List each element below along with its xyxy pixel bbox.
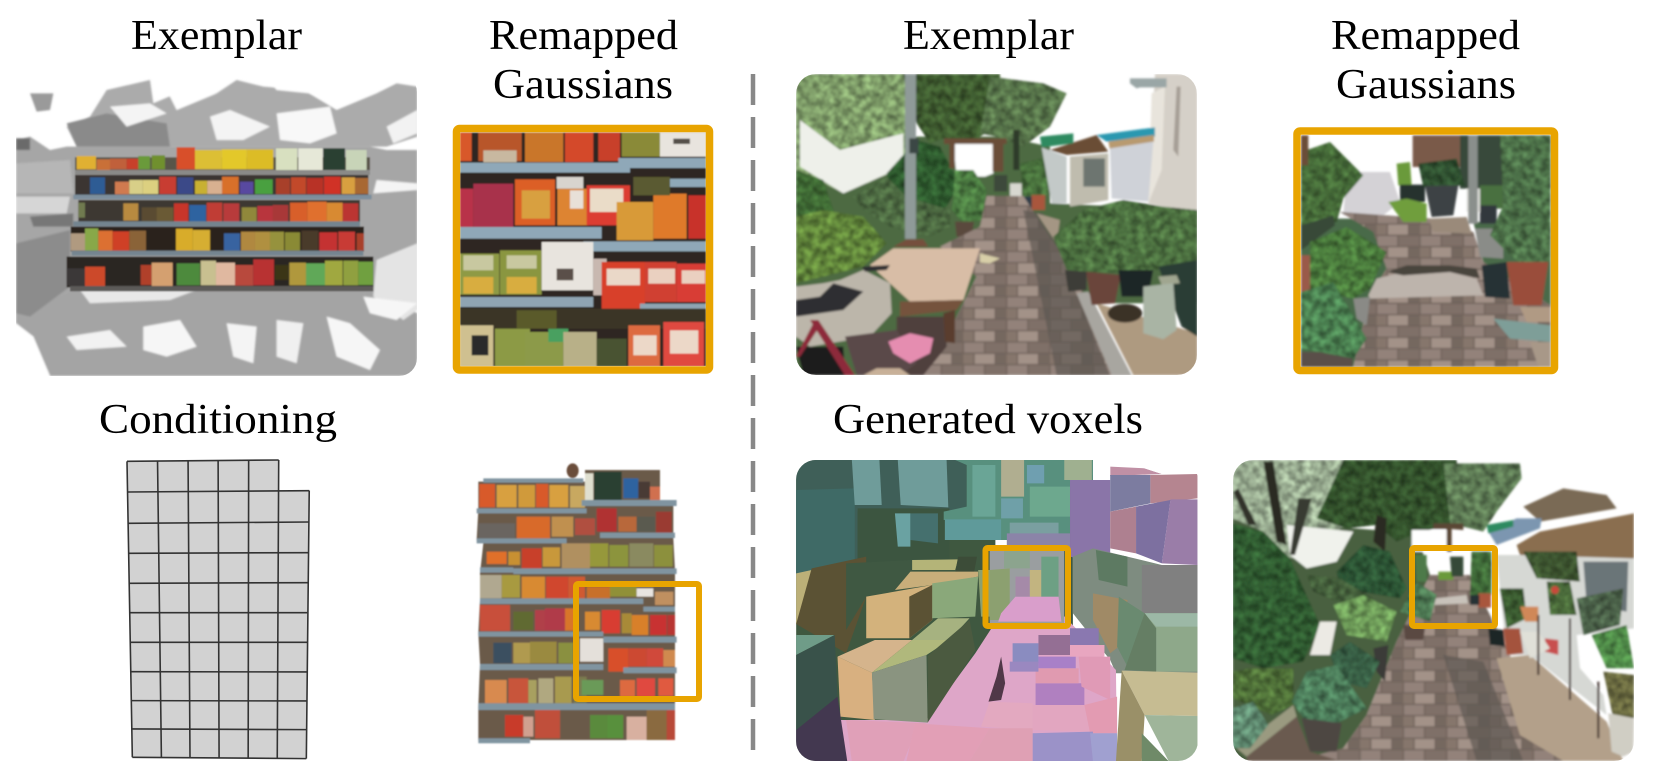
row 7 bags: [485, 677, 673, 703]
mid foliage: [853, 177, 950, 237]
foliage under-layer filling gaps: [1233, 518, 1430, 761]
row 1 bags: [479, 472, 660, 508]
shelf row 4 products: [71, 227, 364, 256]
panel: generated voxels render: [796, 460, 1198, 761]
shelf strip 2: [460, 227, 706, 251]
plants behind pavement: [952, 170, 987, 223]
upper-centre teal voxels: [944, 460, 1093, 550]
foliage under-layer filling gaps: [796, 137, 1197, 375]
title: Conditioning: Conditioning: [99, 397, 337, 443]
shelf row 3 products: [73, 200, 360, 226]
panel: reconstructed snack shelf: [477, 463, 699, 743]
grey foliage surroundings: [16, 74, 417, 376]
pavement: [1293, 575, 1563, 761]
row 5 bags: [480, 605, 675, 635]
pink floor: [840, 613, 1117, 761]
right large plant: [1475, 135, 1551, 305]
shelf row 1 products: [75, 147, 370, 175]
row 8 bags: [505, 708, 675, 740]
panel: alley exemplar photo: [796, 74, 1197, 375]
backing rows: [477, 470, 675, 740]
second row of bags: [460, 177, 706, 240]
right lower blocks: [1116, 613, 1197, 761]
title: Exemplar (left): Exemplar: [131, 13, 302, 59]
building wall: [1040, 74, 1197, 213]
tan bowl: [863, 368, 910, 375]
potted plants on right: [1053, 200, 1197, 273]
bottom row of bags: [460, 309, 706, 366]
title: Remapped Gaussians (left): Remapped: [489, 13, 678, 59]
pavement: [918, 196, 1132, 375]
puddle: [1368, 269, 1483, 299]
title: Exemplar (right): Exemplar: [903, 13, 1074, 59]
left potted plants: [1233, 582, 1437, 761]
bicycle and cloth: [796, 270, 892, 347]
pergola: [944, 138, 1007, 172]
pavement: [1340, 212, 1551, 367]
panel: conditioning grid: [127, 460, 309, 759]
divider: dashed vertical line: [751, 74, 755, 750]
right sandy verge: [1497, 655, 1623, 761]
left tree: [1301, 142, 1363, 225]
grid lines: [127, 460, 309, 759]
bottom-left dark block: [796, 635, 847, 761]
shelf row 5 products: [67, 257, 373, 291]
shelf strips: [477, 478, 677, 743]
tree canopy: [1233, 460, 1522, 568]
pot at base of pole: [893, 239, 928, 247]
shelf strip 1: [460, 158, 706, 173]
title: Remapped Gaussians (right): [1331, 13, 1520, 108]
orange highlight box: [576, 584, 699, 699]
far plants in crop: [1415, 552, 1492, 608]
title: Remapped Gaussians (left): Gaussians: [493, 62, 673, 108]
pink bucket: [888, 333, 933, 363]
kerb strip: [1077, 292, 1132, 375]
title: Generated voxels: Generated voxels: [833, 397, 1143, 443]
left stepped blocks: [838, 570, 1010, 723]
lattice: [1413, 135, 1460, 167]
upper-left dark teal voxels: [796, 460, 967, 603]
third row of bags: [460, 242, 706, 312]
left olive wall: [796, 557, 978, 653]
wall plants and pots: [1488, 552, 1634, 757]
panel: generated alley render: [1233, 460, 1634, 761]
far alley sky: [1412, 530, 1447, 552]
shelf row 2 products: [73, 175, 372, 199]
middle bush: [1337, 545, 1407, 598]
left bushes: [796, 210, 887, 283]
base fill behind blocks: [796, 460, 1093, 761]
pergola: [1433, 523, 1463, 552]
row 2 bags: [478, 508, 672, 538]
left low plants: [1301, 215, 1387, 367]
left large bush: [1233, 523, 1320, 668]
sky through pergola: [953, 144, 993, 177]
utility pole: [905, 74, 916, 239]
tree canopy: [796, 74, 1067, 230]
shelf strip 3: [460, 296, 706, 310]
orange frame: [1297, 131, 1554, 370]
teal stain and sand patches: [1493, 307, 1551, 367]
low foliage: [1307, 575, 1373, 602]
row 4 bags: [480, 575, 673, 605]
conifer: [886, 140, 955, 208]
title: Remapped Gaussians (left): [489, 13, 678, 108]
panel: remapped gaussians snack close-up: [456, 128, 710, 370]
building: [1487, 488, 1634, 715]
top row of bags: [460, 133, 706, 162]
sky corner: [1093, 460, 1197, 475]
foliage under-layer filling gaps: [1301, 219, 1551, 367]
table: [870, 248, 980, 302]
grey grid fill: [127, 460, 309, 759]
right green-grey wall: [1073, 548, 1197, 673]
panel: remapped gaussians alley close-up: [1297, 131, 1554, 370]
dark brick patch: [1443, 655, 1523, 761]
orange highlight box: [986, 548, 1068, 626]
right purple voxels: [1070, 467, 1197, 567]
row 6 bags: [493, 638, 675, 672]
dark backing: [460, 133, 706, 366]
top-right dark foliage: [1460, 135, 1551, 189]
panel: exemplar snack shelf with grey surroundings: [16, 74, 417, 376]
title: Remapped Gaussians (right): Remapped: [1331, 13, 1520, 59]
hazy background: [1343, 172, 1400, 215]
orange highlight box: [1412, 548, 1495, 626]
row 3 bags: [487, 543, 673, 568]
pole and box: [1467, 135, 1482, 224]
shrubs and pots: [1388, 159, 1472, 234]
orange frame: [456, 128, 710, 370]
plastic jar: [1143, 283, 1177, 339]
title: Remapped Gaussians (right): Gaussians: [1336, 62, 1516, 108]
top debris: [567, 463, 579, 478]
hole in sand: [1108, 304, 1142, 323]
dark brick strip: [1023, 210, 1110, 375]
far-centre alley voxels: [990, 550, 1064, 623]
sandy ground: [1097, 303, 1197, 375]
